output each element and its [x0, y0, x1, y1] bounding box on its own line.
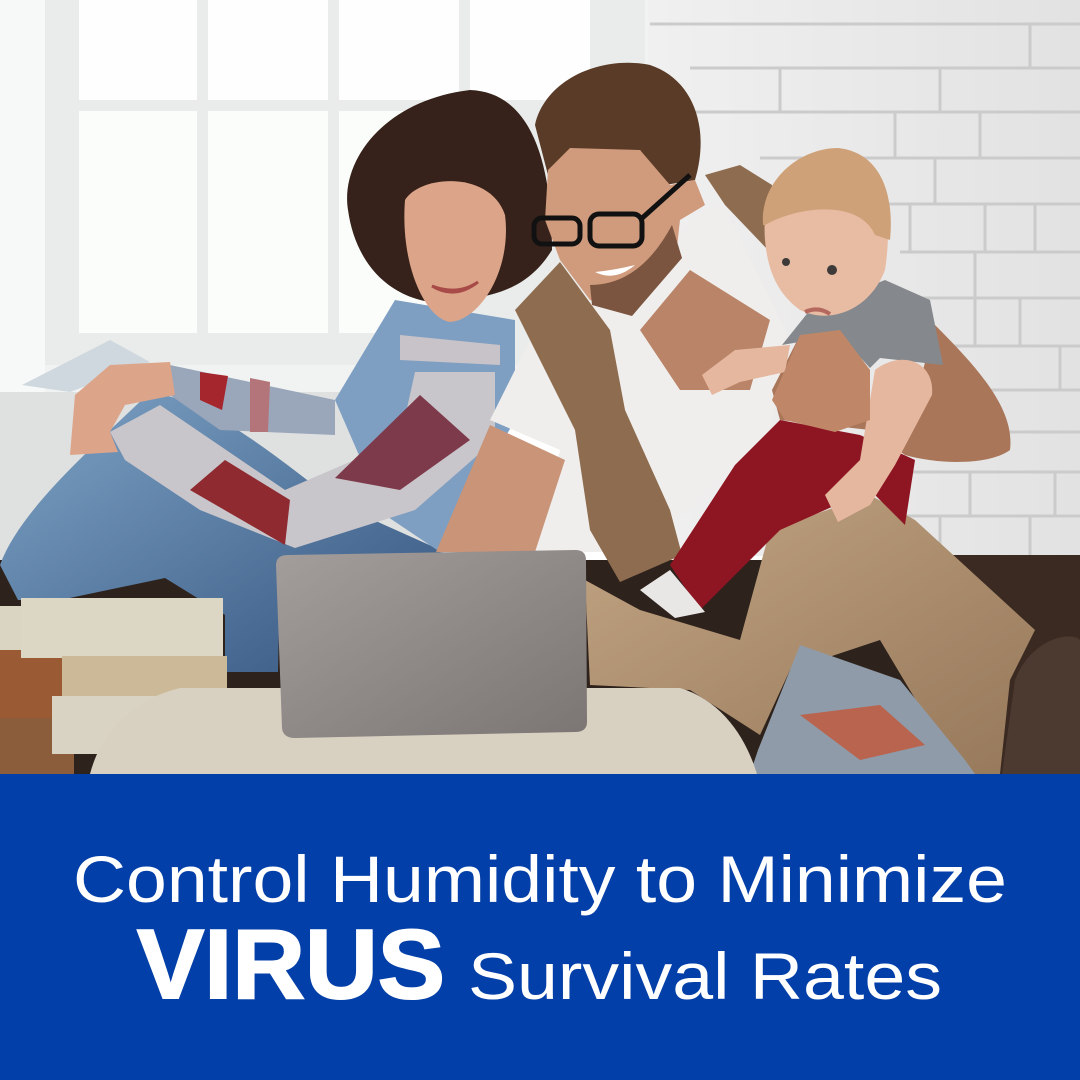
- woman: jeans: [0, 392, 445, 672]
- laptop: [276, 550, 587, 738]
- title line 2: Survival Rates: [468, 939, 942, 1013]
- baby: sock: [640, 570, 705, 618]
- baby: grey shirt: [782, 280, 943, 368]
- man: white shirt: [490, 200, 790, 552]
- man: glasses: [534, 175, 690, 246]
- man: hand on baby: [772, 330, 870, 432]
- man: face: [545, 148, 705, 312]
- baby: head: [763, 148, 891, 316]
- woman: neck and face: [404, 181, 506, 322]
- books: [0, 598, 227, 774]
- man: brown knit vest: [515, 165, 772, 582]
- sill papers: [22, 340, 150, 392]
- man: arm holding baby: [772, 325, 1010, 462]
- man: hair: [535, 63, 701, 185]
- window background: [0, 0, 1080, 774]
- man: forearm: [436, 425, 565, 552]
- man: boot: [1002, 636, 1080, 774]
- title banner: [0, 774, 1080, 1080]
- baby: red trousers: [670, 420, 915, 610]
- pillow: [90, 688, 757, 774]
- baby: arm: [702, 345, 932, 522]
- woman: shirt and plaid sleeve: [110, 300, 515, 552]
- photo: family using a laptop at home: [0, 0, 1080, 774]
- title line 2: VIRUS: [137, 909, 445, 1019]
- brick wall: [648, 0, 1080, 774]
- title line 1: Control Humidity to Minimize: [73, 842, 1007, 916]
- woman: hair: [347, 90, 552, 302]
- knitted garment: [750, 645, 975, 774]
- man: trousers: [585, 495, 1035, 774]
- title line 2: [137, 909, 942, 1019]
- woman: hands: [70, 362, 175, 455]
